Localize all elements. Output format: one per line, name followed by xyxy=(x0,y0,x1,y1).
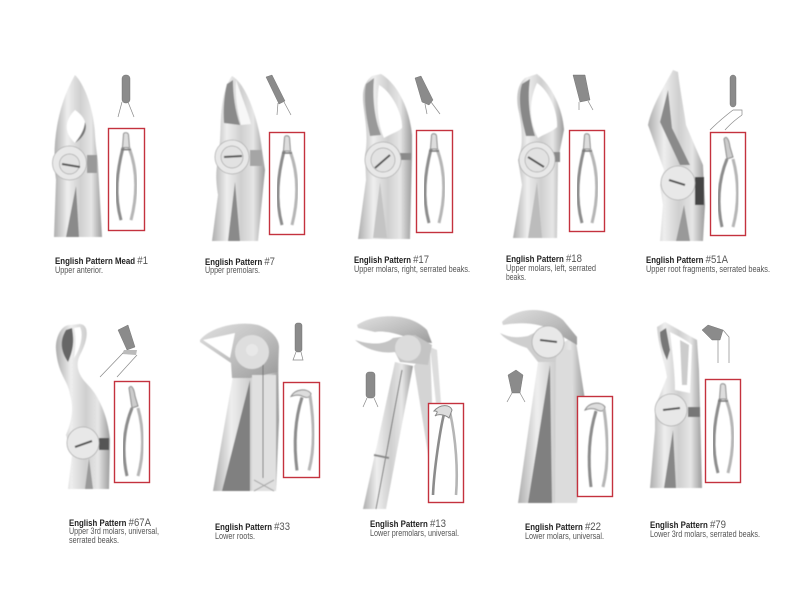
large forceps #18 xyxy=(513,74,564,238)
tip icon #67A xyxy=(100,325,137,377)
panel: #17 xyxy=(354,74,470,274)
panel: #13 xyxy=(355,316,464,538)
caption #33: English Pattern #33 xyxy=(215,521,290,533)
tip icon #51A xyxy=(710,75,742,130)
tip icon #33 xyxy=(293,323,303,360)
large forceps #33 xyxy=(200,324,279,491)
large forceps #13 xyxy=(355,316,441,509)
caption #13: Lower premolars, universal. xyxy=(370,528,459,538)
caption #67A: English Pattern #67A xyxy=(69,517,152,529)
large forceps #51A xyxy=(648,70,705,241)
caption #17: English Pattern #17 xyxy=(354,254,429,266)
panel: #22 xyxy=(500,310,612,541)
caption #1: Upper anterior. xyxy=(55,265,103,275)
large forceps #79 xyxy=(650,322,702,488)
caption #1 xyxy=(55,255,148,275)
caption #13: English Pattern #13 xyxy=(370,518,446,530)
red box with small forceps #33 xyxy=(284,382,320,478)
red box with small forceps #22 xyxy=(578,396,612,496)
large forceps #17 xyxy=(358,74,412,239)
caption #67A xyxy=(69,517,159,545)
tip icon #17 xyxy=(415,76,440,114)
caption #22: Lower molars, universal. xyxy=(525,531,604,541)
caption #1: English Pattern Mead #1 xyxy=(55,255,148,267)
red box with small forceps #67A xyxy=(114,382,150,482)
red box with small forceps #13 xyxy=(428,404,464,502)
caption #67A: Upper 3rd molars, universal, xyxy=(69,526,159,536)
caption #79: English Pattern #79 xyxy=(650,519,726,531)
red box with small forceps #17 xyxy=(416,130,452,232)
caption #18 xyxy=(506,253,596,282)
caption #13 xyxy=(370,518,459,538)
large forceps #22 xyxy=(500,310,585,503)
caption #7: Upper premolars. xyxy=(205,265,260,275)
large forceps #1 xyxy=(52,75,102,237)
red box with small forceps #51A xyxy=(710,132,746,236)
red box with small forceps #7 xyxy=(270,132,304,234)
panel: Mead #1 xyxy=(52,75,148,275)
panel: #67A xyxy=(56,324,159,545)
caption #18: beaks. xyxy=(506,272,526,282)
caption #7 xyxy=(205,256,275,275)
caption #79: Lower 3rd molars, serrated beaks. xyxy=(650,529,760,539)
caption #51A: Upper root fragments, serrated beaks. xyxy=(646,264,770,274)
tip icon #7 xyxy=(266,75,291,115)
large forceps #67A xyxy=(56,324,110,489)
caption #51A: English Pattern #51A xyxy=(646,254,729,266)
caption #18: English Pattern #18 xyxy=(506,253,582,265)
panel: #51A xyxy=(646,70,770,274)
red box with small forceps #1 xyxy=(108,128,144,230)
tip icon #1 xyxy=(118,75,134,117)
red box with small forceps #79 xyxy=(706,380,740,482)
caption #17 xyxy=(354,254,470,274)
panel: #18 xyxy=(506,74,604,282)
caption #33 xyxy=(215,521,290,541)
red box with small forceps #18 xyxy=(570,130,604,232)
tip icon #79 xyxy=(702,325,729,363)
tip icon #18 xyxy=(573,75,593,110)
panel: #79 xyxy=(650,322,760,539)
caption #17: Upper molars, right, serrated beaks. xyxy=(354,264,470,274)
large forceps #7 xyxy=(212,76,265,241)
caption #22: English Pattern #22 xyxy=(525,521,601,533)
panel: #7 xyxy=(205,75,304,275)
tip icon #13 xyxy=(363,372,378,407)
caption #67A: serrated beaks. xyxy=(69,535,119,545)
tip icon #22 xyxy=(507,370,525,402)
caption #18: Upper molars, left, serrated xyxy=(506,263,596,273)
caption #79 xyxy=(650,519,760,539)
panel: #33 xyxy=(200,323,320,541)
caption #33: Lower roots. xyxy=(215,531,255,541)
caption #22 xyxy=(525,521,604,541)
caption #51A xyxy=(646,254,770,274)
caption #7: English Pattern #7 xyxy=(205,256,275,268)
